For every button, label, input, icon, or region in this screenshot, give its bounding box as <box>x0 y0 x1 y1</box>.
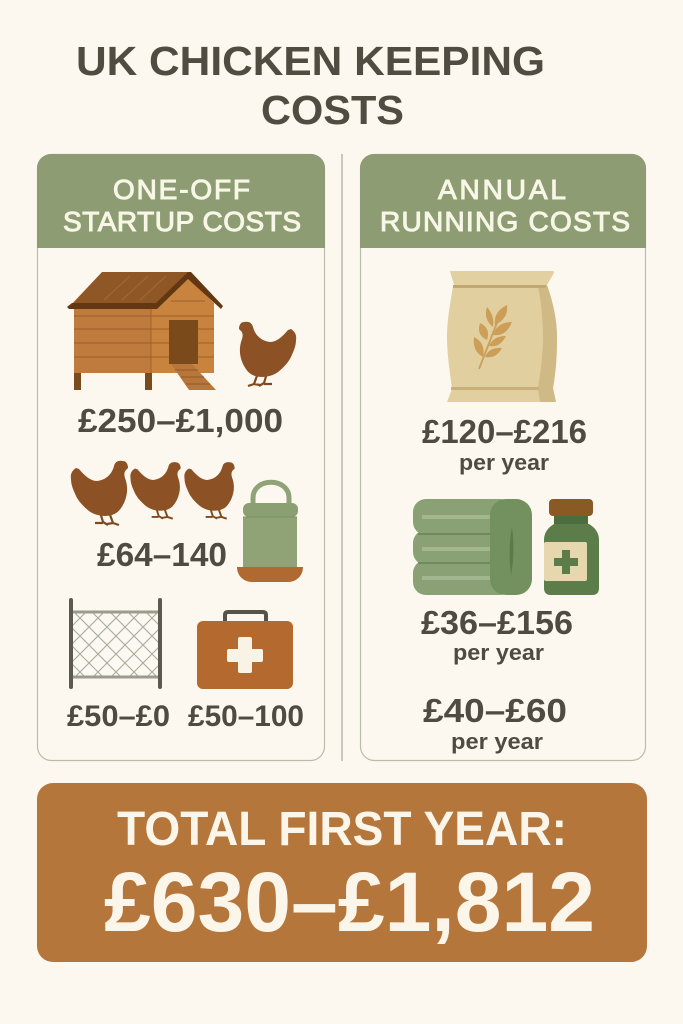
price: bedding and health: £36–£156 <box>421 604 573 641</box>
panel header: one-off startup costs: ONE-OFF <box>113 174 250 205</box>
caption: per year: per year <box>453 640 544 665</box>
title: COSTS <box>261 87 404 133</box>
title <box>76 38 545 133</box>
icon: feed bag with wheat <box>447 271 557 402</box>
icon: medicine bottle <box>544 499 599 595</box>
banner label: TOTAL FIRST YEAR: <box>117 803 567 856</box>
panel header: annual running costs: ANNUAL <box>438 174 566 205</box>
panel header: annual running costs: RUNNING COSTS <box>380 206 630 237</box>
icon: hen <box>239 322 296 386</box>
icon: first aid kit <box>197 612 293 689</box>
panel: one-off startup costs <box>37 154 325 760</box>
price: first aid kit: £50–100 <box>188 700 304 733</box>
caption: per year: per year <box>451 729 543 754</box>
caption: per year: per year <box>459 450 549 475</box>
price: other costs: £40–£60 <box>423 692 567 729</box>
icon: three hens <box>71 461 235 525</box>
panel: annual running costs <box>360 154 646 760</box>
panel header: one-off startup costs: STARTUP COSTS <box>63 206 301 237</box>
panel header: one-off startup costs <box>37 154 325 248</box>
title: UK CHICKEN KEEPING <box>76 38 545 84</box>
icon: rolled green bedding <box>413 499 532 595</box>
price: fencing: £50–£0 <box>67 700 170 733</box>
price: coop: £250–£1,000 <box>78 402 283 439</box>
icon: wooden chicken coop <box>67 272 223 390</box>
icon: wire mesh fence <box>69 598 162 689</box>
price: feed: £120–£216 <box>422 413 587 450</box>
icon: green poultry feeder <box>237 482 303 582</box>
panel header: annual running costs <box>360 154 646 248</box>
banner: total first year <box>37 783 647 962</box>
price: hens: £64–140 <box>97 536 227 573</box>
banner total amount: £630–£1,812 <box>104 855 595 949</box>
